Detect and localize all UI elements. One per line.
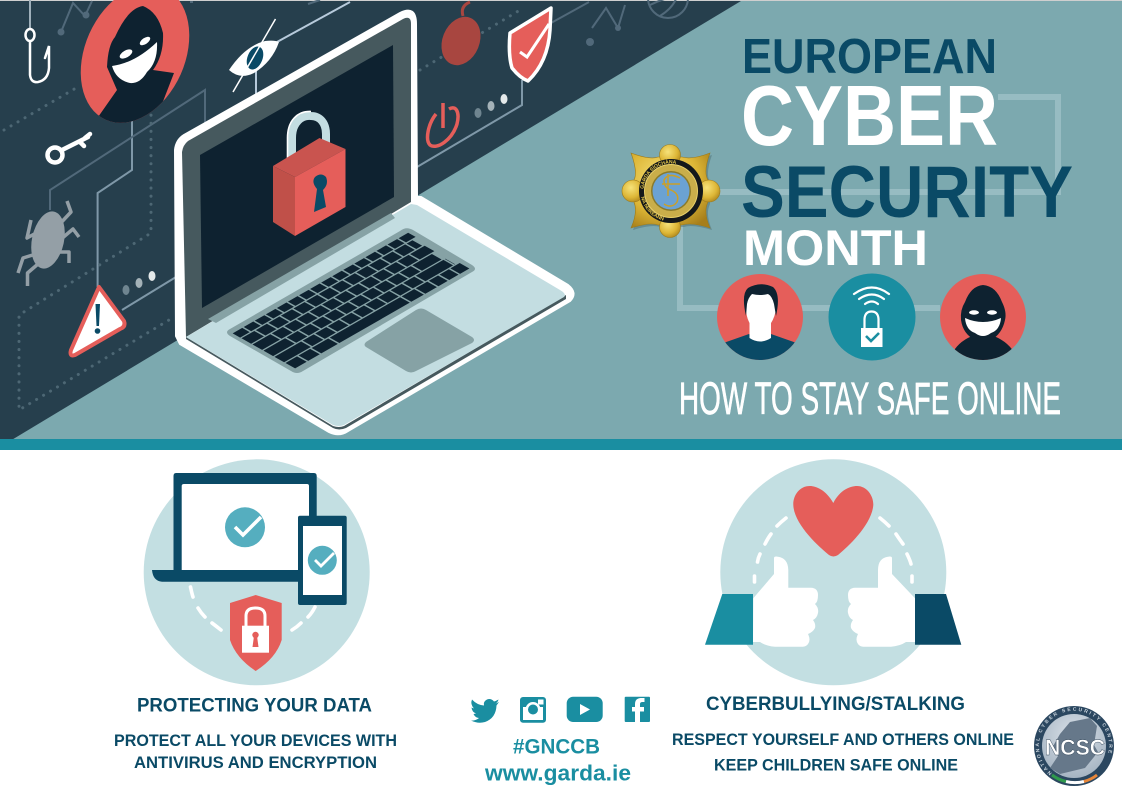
icon: shield with check (509, 8, 551, 81)
teal band (0, 439, 1122, 450)
icon: dots near warning (122, 271, 156, 295)
dashed arcs (754, 518, 912, 582)
icon: instagram (520, 697, 546, 723)
title: CYBER (741, 69, 998, 164)
laptop white outline (175, 11, 574, 434)
badge: Garda crest: GARDA SÍOCHÁNA (640, 159, 676, 189)
panel: protecting your data (114, 459, 397, 772)
hashtag: #GNCCB (513, 735, 600, 758)
pale circle (720, 459, 946, 685)
panel: cyberbullying (672, 459, 1014, 775)
badge: NCSC: NATIONAL CYBER SECURITY CENTRE (1036, 707, 1113, 776)
heading: CYBERBULLYING/STALKING (706, 693, 965, 715)
title (741, 30, 1073, 276)
icon: person circle (715, 274, 805, 362)
body text (672, 731, 1014, 775)
body text: ANTIVIRUS AND ENCRYPTION (134, 754, 377, 772)
dashed arc (190, 587, 315, 630)
title: MONTH (743, 220, 928, 276)
title: SECURITY (741, 152, 1073, 233)
body text: KEEP CHILDREN SAFE ONLINE (714, 757, 958, 775)
body text: RESPECT YOURSELF AND OTHERS ONLINE (672, 731, 1014, 749)
badge: Garda crest (622, 144, 720, 238)
illustration: laptop (175, 11, 574, 434)
icon: fish hook (26, 29, 49, 82)
icon: laptop (152, 473, 317, 582)
icon: power symbol (428, 103, 458, 146)
icon: warning triangle (70, 287, 124, 355)
panel: hero background (0, 0, 1122, 450)
website: www.garda.ie (484, 761, 631, 786)
laptop lid (182, 18, 411, 337)
laptop screen (200, 45, 394, 308)
icon: phone (298, 516, 347, 605)
icon: shield lock (230, 595, 282, 671)
badge: NCSC: NCSC (1045, 735, 1105, 760)
laptop base (186, 204, 566, 430)
icon: key (48, 134, 90, 162)
icon: dots near shield (474, 94, 508, 118)
icon: crossed eye (229, 19, 279, 92)
dark diagonal panel (0, 1, 741, 447)
panel: social links (471, 697, 650, 786)
heading: PROTECTING YOUR DATA (137, 695, 372, 717)
icon: hacker in red oval (80, 0, 190, 123)
icon: right thumb up (848, 557, 961, 647)
icon: bug (18, 201, 79, 286)
padlock (273, 111, 346, 236)
icon: facebook (625, 697, 650, 722)
circuit lines (4, 0, 688, 410)
background circuit lines right (680, 97, 1058, 308)
body text: PROTECT ALL YOUR DEVICES WITH (114, 732, 397, 750)
icon: bomb (434, 2, 488, 71)
icon: hacker circle (940, 274, 1026, 362)
icon: heart (793, 486, 873, 556)
badge: Garda crest: NA hÉIREANN (641, 196, 664, 220)
icon: wifi lock circle (828, 274, 916, 360)
icon: youtube (567, 697, 603, 722)
icon: left thumb up (705, 557, 818, 647)
title: EUROPEAN (742, 30, 997, 84)
trackpad (364, 308, 474, 372)
pale circle (144, 459, 370, 685)
icon: twitter (471, 699, 499, 723)
body text (114, 732, 397, 772)
keyboard (227, 228, 475, 373)
